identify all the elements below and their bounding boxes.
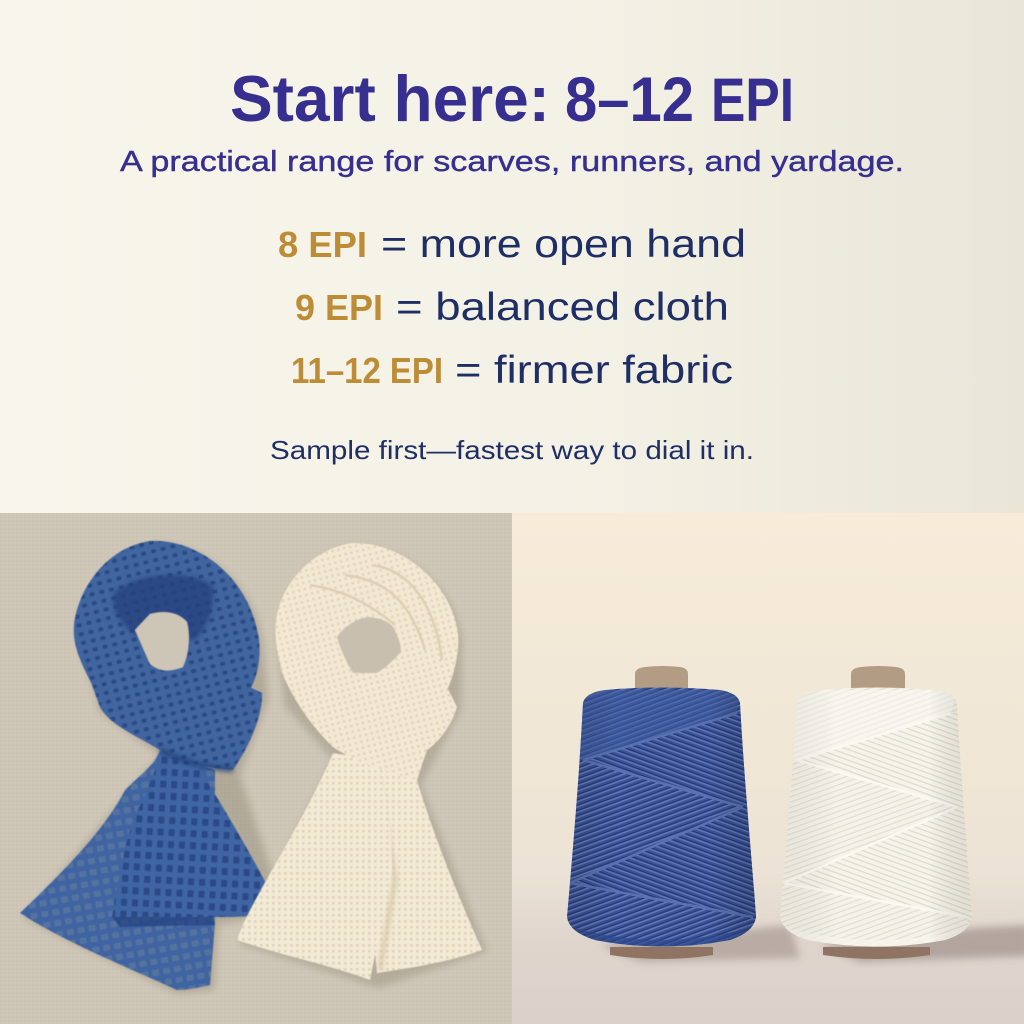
blue scarf <box>20 541 285 994</box>
knot band <box>280 667 457 780</box>
title: EPI <box>711 66 794 134</box>
line: 9 EPI: 9 EPI <box>295 287 383 328</box>
line: 11-12 EPI <box>291 349 733 392</box>
line: 8 EPI: 8 EPI <box>278 224 367 265</box>
left tail <box>20 750 215 990</box>
line: 11-12 EPI: = firmer fabric <box>455 349 733 392</box>
left tail <box>237 753 392 980</box>
line: 9 EPI: = balanced cloth <box>396 286 729 329</box>
title: Start here: <box>230 62 550 135</box>
background panel <box>0 0 1024 513</box>
title <box>230 62 794 135</box>
line: 8 EPI: = more open hand <box>381 223 746 266</box>
neck loop <box>74 541 260 705</box>
loop opening <box>337 617 401 673</box>
knot band <box>83 660 262 770</box>
front tail <box>112 752 278 917</box>
loop opening <box>135 612 189 670</box>
photo panel: yarn cones <box>512 513 1024 1024</box>
title: 8–12 <box>565 65 694 135</box>
subtitle: A practical range for scarves, runners, and yardage. <box>120 146 904 178</box>
white yarn cone <box>775 666 980 960</box>
cream scarf <box>237 543 487 988</box>
blue yarn cone <box>560 666 760 960</box>
EPI guide list <box>278 223 746 392</box>
line: 9 EPI <box>295 286 729 329</box>
sampling note: Sample first—fastest way to dial it in. <box>270 435 754 465</box>
neck loop <box>275 543 458 690</box>
photo panel: scarves on linen <box>0 513 512 1024</box>
line: 8 EPI <box>278 223 746 266</box>
line: 11-12 EPI: 11–12 EPI <box>291 350 443 391</box>
right tail <box>360 760 482 973</box>
cast shadows <box>600 925 1024 962</box>
